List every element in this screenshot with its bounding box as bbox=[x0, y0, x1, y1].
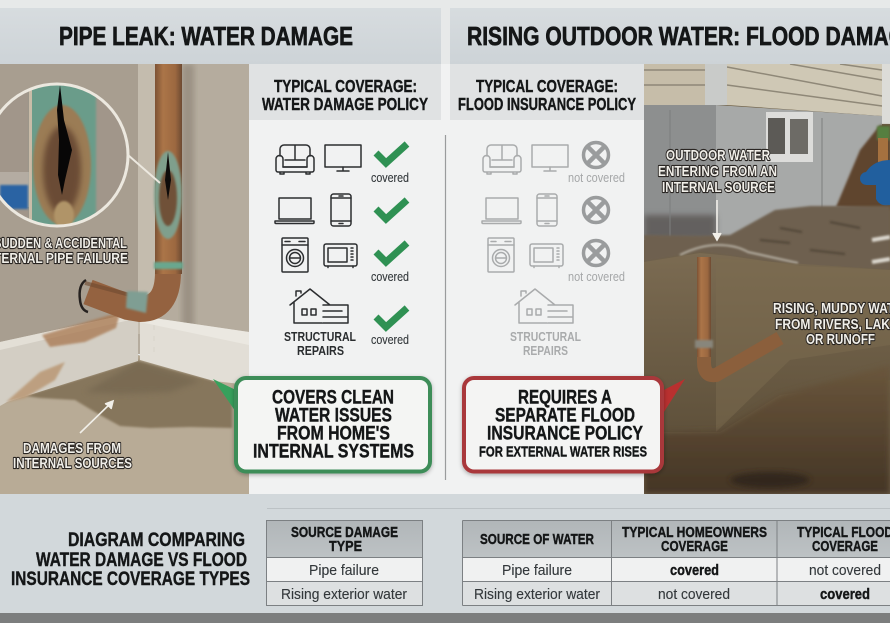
label: damages from internal sources bbox=[13, 441, 132, 472]
table: source damage type: Rising exterior water bbox=[281, 586, 407, 603]
diagram title bbox=[11, 529, 250, 590]
icon: house bbox=[515, 289, 573, 323]
arrow: down to water bbox=[713, 200, 721, 240]
label: damages from internal sources: INTERNAL SOURCES bbox=[13, 456, 132, 472]
column divider bbox=[444, 135, 446, 480]
callout: red: INSURANCE POLICY bbox=[487, 422, 643, 444]
structural repairs label: REPAIRS bbox=[523, 343, 568, 358]
icon: sofa bbox=[483, 145, 521, 174]
callout: green: FROM HOME'S bbox=[277, 422, 390, 444]
label: outdoor water bbox=[658, 148, 777, 196]
diagram title: WATER DAMAGE VS FLOOD bbox=[36, 549, 247, 571]
icon: not covered bbox=[584, 142, 608, 168]
left baseboard bbox=[0, 312, 138, 406]
concrete foundation bbox=[644, 105, 716, 240]
heading: flood insurance policy bbox=[450, 64, 644, 120]
panel: water damage coverage icons bbox=[275, 144, 409, 358]
structural repairs label bbox=[510, 329, 581, 358]
icon: phone bbox=[331, 194, 351, 226]
icon: check bbox=[376, 243, 407, 262]
water surface bbox=[644, 204, 890, 240]
label: rising muddy water: OR RUNOFF bbox=[806, 332, 875, 348]
icon: phone bbox=[537, 194, 557, 226]
icon: check bbox=[376, 308, 407, 327]
callout: red bbox=[464, 378, 685, 472]
table: coverage comparison bbox=[462, 520, 890, 606]
callout: green: COVERS CLEAN bbox=[272, 386, 394, 408]
label: outdoor water: ENTERING FROM AN bbox=[658, 164, 777, 180]
not covered label: not covered bbox=[568, 269, 625, 284]
covered label: covered bbox=[371, 170, 409, 185]
structural repairs label: STRUCTURAL bbox=[510, 329, 581, 344]
diagram title: DIAGRAM COMPARING bbox=[68, 529, 245, 551]
icon: washer bbox=[488, 238, 514, 272]
heading: flood insurance policy: TYPICAL COVERAGE: bbox=[476, 76, 618, 96]
photo: flooded exterior foundation bbox=[644, 64, 890, 494]
icon: sofa bbox=[276, 145, 314, 174]
callout line to pipe bbox=[128, 155, 160, 183]
callout: red: REQUIRES A bbox=[518, 386, 612, 408]
table: coverage comparison: not covered bbox=[658, 586, 730, 603]
muddy floor bbox=[644, 365, 890, 494]
wet carpet puddle bbox=[25, 361, 232, 428]
heading: water damage policy bbox=[249, 64, 441, 120]
structural repairs label: STRUCTURAL bbox=[284, 329, 356, 344]
icon: microwave bbox=[324, 244, 357, 268]
label: pipe failure bbox=[0, 236, 128, 267]
callout: green: INTERNAL SYSTEMS bbox=[253, 440, 414, 462]
panel: bottom band bbox=[0, 494, 890, 623]
covered label: covered bbox=[371, 332, 409, 347]
heading: water damage policy: WATER DAMAGE POLICY bbox=[262, 94, 428, 114]
icon: laptop bbox=[482, 198, 521, 224]
icon: check bbox=[376, 144, 407, 163]
heading: flood insurance policy: FLOOD INSURANCE POLICY bbox=[458, 94, 636, 114]
icon: tv bbox=[532, 145, 568, 171]
heading: water damage policy: TYPICAL COVERAGE: bbox=[274, 76, 417, 96]
label: damages from internal sources: DAMAGES FROM bbox=[23, 441, 121, 457]
table: coverage comparison: not covered bbox=[809, 562, 881, 579]
label: outdoor water: INTERNAL SOURCE bbox=[662, 180, 775, 196]
structural repairs label bbox=[284, 329, 356, 358]
photo: leaking indoor pipe bbox=[0, 64, 249, 494]
icon: tv bbox=[325, 145, 361, 171]
panel: flood header bbox=[450, 8, 890, 64]
mound with hydrant bbox=[836, 125, 890, 210]
structural repairs label: REPAIRS bbox=[297, 343, 344, 358]
pipe patina and crack bbox=[154, 151, 182, 239]
icon: microwave bbox=[530, 244, 563, 268]
covered label: covered bbox=[371, 269, 409, 284]
icon: house bbox=[290, 289, 348, 323]
label: rising muddy water bbox=[773, 301, 890, 348]
carpet floor bbox=[0, 355, 249, 494]
icon: not covered bbox=[584, 198, 608, 222]
table: source damage type: TYPE bbox=[329, 539, 362, 555]
table: coverage comparison: COVERAGE bbox=[661, 539, 728, 555]
table: coverage comparison: TYPICAL HOMEOWNERS bbox=[622, 525, 767, 541]
copper pipe bbox=[84, 274, 181, 322]
basement window bbox=[766, 112, 813, 162]
icon: laptop bbox=[275, 198, 314, 224]
diagram title: INSURANCE COVERAGE TYPES bbox=[11, 568, 250, 590]
table: coverage comparison: SOURCE OF WATER bbox=[480, 532, 594, 548]
right baseboard bbox=[140, 316, 249, 385]
icon: check bbox=[376, 200, 407, 219]
callout: red: SEPARATE FLOOD bbox=[495, 404, 635, 426]
table: coverage comparison: Pipe failure bbox=[502, 562, 572, 579]
siding bbox=[644, 64, 705, 105]
title: pipe leak: PIPE LEAK: WATER DAMAGE bbox=[59, 21, 353, 51]
not covered label: not covered bbox=[568, 170, 625, 185]
table: source damage type bbox=[266, 520, 422, 606]
label: outdoor water: OUTDOOR WATER bbox=[666, 148, 770, 164]
underwater section bbox=[644, 253, 826, 432]
callout: green bbox=[213, 378, 430, 472]
submerged pipe bbox=[697, 332, 784, 382]
icon: washer bbox=[282, 238, 308, 272]
panel: flood coverage icons bbox=[482, 142, 625, 358]
table: source damage type: Pipe failure bbox=[309, 562, 379, 579]
icon: not covered bbox=[584, 240, 608, 266]
drips bbox=[154, 325, 155, 352]
table: coverage comparison: covered bbox=[670, 562, 719, 579]
table: source damage type: SOURCE DAMAGE bbox=[291, 525, 398, 541]
table: coverage comparison: Rising exterior water bbox=[474, 586, 600, 603]
magnified pipe crack bbox=[0, 83, 130, 229]
pipe flange bbox=[80, 280, 88, 312]
table: coverage comparison: covered bbox=[820, 586, 870, 603]
arrow: to puddle bbox=[80, 401, 113, 433]
panel: pipe leak header bbox=[0, 8, 441, 64]
callout: green: WATER ISSUES bbox=[275, 404, 392, 426]
panel: coverage columns background bbox=[249, 64, 644, 494]
callout: red: FOR EXTERNAL WATER RISES bbox=[479, 444, 647, 460]
